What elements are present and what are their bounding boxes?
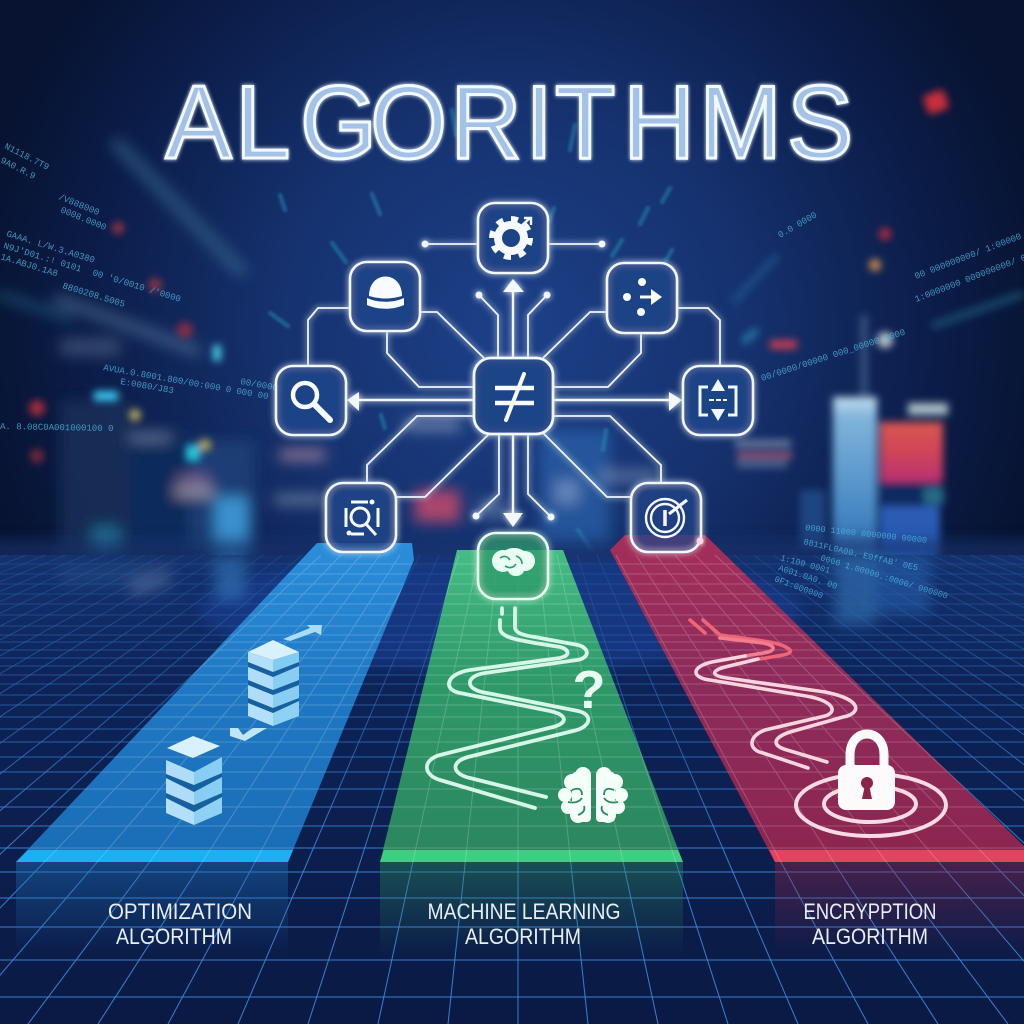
icon: padlock xyxy=(838,734,895,810)
data text: right upper: 0.0 0000 xyxy=(776,210,819,241)
blurred city: left xyxy=(60,338,660,557)
label: optimization algorithm: OPTIMIZATION xyxy=(108,899,252,924)
node: flow xyxy=(607,263,677,333)
node: helmet xyxy=(350,262,420,331)
icon: check mark xyxy=(230,728,267,741)
target rings xyxy=(796,774,946,836)
icon: optimization stack lower xyxy=(166,736,222,825)
data text: left xyxy=(0,142,284,434)
network connectors xyxy=(308,244,720,517)
data text: right upper: 00/0000/00000 000_00000 0000 xyxy=(760,328,907,384)
panel: optimization algorithm strip xyxy=(16,543,414,862)
panel: machine learning algorithm strip xyxy=(380,550,683,862)
node: search xyxy=(276,366,346,435)
data text: left: /V888000 xyxy=(57,193,101,218)
floor xyxy=(0,555,1024,1024)
label: optimization algorithm xyxy=(108,899,252,949)
arrow: right xyxy=(553,392,682,411)
data text: left: 1A.ABJ0.1A8 xyxy=(0,252,59,279)
node: brain xyxy=(478,533,548,599)
grid overlay on strips xyxy=(29,554,1024,862)
data text: left: 00 '0/0010 /'0000 xyxy=(91,268,182,305)
data text: left: N9J'D01.:! 0101 xyxy=(2,241,83,275)
label: machine learning algorithm: ALGORITHM xyxy=(465,924,581,949)
connector dots xyxy=(422,240,606,520)
data text: right lower: 8811FL0A00. E0ffAB' 0E5 xyxy=(802,537,919,573)
label: encryption algorithm: ENCRYPPTION xyxy=(804,899,936,924)
arrow: down xyxy=(503,435,523,527)
node: central not-equal xyxy=(474,358,553,434)
arrow: left xyxy=(347,392,473,411)
data text: right lower: A001.0A0. 00 xyxy=(777,563,838,592)
node: data search xyxy=(326,483,396,552)
label: encryption algorithm: ALGORITHM xyxy=(812,924,928,949)
floor centre glow xyxy=(200,550,800,670)
data text: right lower: 0000 1.00000.:0000/ 000000 xyxy=(819,553,949,602)
data text: left: GAAA. L/W.3.A0380 xyxy=(5,229,96,266)
question mark: ? xyxy=(572,660,606,720)
data text: left: 00/00008 xyxy=(239,377,284,394)
encryption path xyxy=(690,620,856,768)
panel: encryption algorithm strip xyxy=(610,535,1024,862)
label: encryption algorithm xyxy=(804,899,936,949)
icon: large brain xyxy=(558,767,628,823)
floor reflections of the city xyxy=(0,540,1024,625)
arrow: up xyxy=(503,279,524,358)
data text: left: N1118.7T9 xyxy=(3,142,50,173)
perspective grid xyxy=(0,555,1024,1024)
data text: left: A. 8.08C0A001000100 0 xyxy=(0,422,114,434)
arrow: optimization up-right xyxy=(283,625,322,641)
node: gear xyxy=(478,203,548,273)
city lights: left xyxy=(29,222,221,463)
blurred beams: right xyxy=(735,258,1020,340)
node: target xyxy=(631,483,704,552)
title: ALGORITHMS xyxy=(166,65,853,181)
strip reflections xyxy=(16,862,1024,957)
floating light streaks xyxy=(270,110,672,548)
blurred city: right xyxy=(735,89,950,567)
data text: right lower: 0F1:000000 xyxy=(773,574,824,601)
label: machine learning algorithm: MACHINE LEARNING xyxy=(428,899,620,924)
label: optimization algorithm: ALGORITHM xyxy=(116,924,232,949)
icon: optimization stack upper xyxy=(248,640,299,726)
data text: right lower: 0000 11000 0000000 00000 xyxy=(805,523,927,546)
data text: right lower xyxy=(773,523,949,602)
machine learning path xyxy=(427,608,588,808)
data text: left: 8800208.5005 xyxy=(61,281,126,310)
data text: right upper xyxy=(760,210,1024,384)
label: machine learning algorithm xyxy=(428,899,620,949)
data text: left: 0008.0000 xyxy=(59,206,108,233)
data text: right lower: 1:100 0001 xyxy=(779,553,831,576)
data text: left: AVUA.0.8001.800/00:000 0 000 00 xyxy=(102,363,269,402)
blurred light streaks: left xyxy=(0,145,240,350)
node: swap xyxy=(683,366,753,435)
data text: left: E:0080/J83 xyxy=(119,377,174,396)
data text: right upper: 00 000000000/ 1:00000 xyxy=(913,232,1023,282)
